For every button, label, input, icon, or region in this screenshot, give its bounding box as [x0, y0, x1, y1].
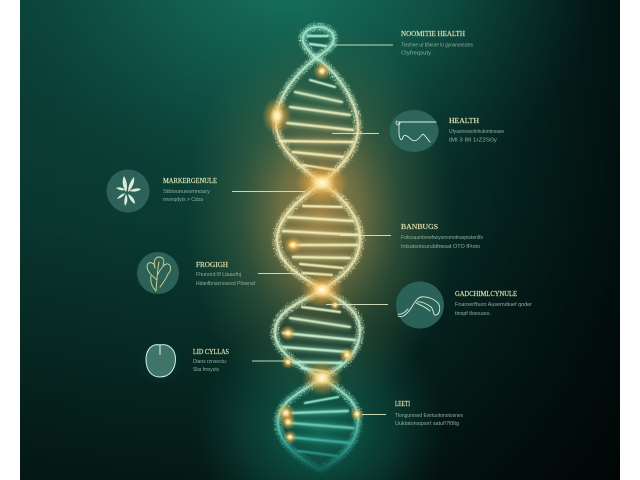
- callout: leeti: Tlongumsed Evirtuotonotosnes: [395, 413, 463, 419]
- callout: leeti: LEETI: [395, 399, 410, 408]
- leader lines: [232, 45, 393, 414]
- helix fuzzy particles: [275, 27, 360, 470]
- callout: frogigh: Fhunonl:0f Ltaaufnj: [196, 272, 241, 278]
- callout: lid cyllas: Sba fmsyuts: [193, 367, 219, 373]
- callout: top health: [401, 29, 473, 56]
- callout: frogigh: FROGIGH: [196, 260, 229, 269]
- callout: top health: NOOMITIE HEALTH: [401, 29, 466, 38]
- callout: markergenule: Stbiounuesmnoary: [163, 189, 210, 195]
- helix rungs: [280, 36, 358, 456]
- callout: markergenule: mwnqdyts > Cdza: [163, 197, 203, 203]
- callout: leeti: Uuktatonsqsort satuf!7l0ltg: [395, 421, 459, 427]
- callout: health: HEALTH: [449, 116, 480, 125]
- callout: bangugs: Intsatsoteurubthwsat OTO fFtsto: [401, 244, 480, 250]
- callout: health: tMl 3 8ll 1rZ2S0y: [449, 138, 497, 144]
- helix strand core: [275, 27, 360, 470]
- callout: gadchimlcynule: Fnaroerfburo Ausemdiuef qoder: [455, 302, 532, 308]
- DNA double helix: [262, 27, 364, 470]
- callout: lid cyllas: LID CYLLAS: [193, 347, 229, 356]
- callout: bangugs: [401, 222, 483, 250]
- icon: leaf in circle: [137, 252, 179, 294]
- callout: gadchimlcynule: tinspf tloesuoo.: [455, 311, 491, 317]
- callout: markergenule: MARKERGENULE: [163, 176, 217, 185]
- callout: bangugs: BANBUGS: [401, 222, 438, 231]
- icon: chart in circle: [390, 110, 438, 152]
- callout: frogigh: Hdanfbnacnoured Pfownaf: [196, 281, 256, 287]
- icon: organ in circle: [396, 282, 444, 328]
- callout: health: Ufyaoneondnhutontnoase: [449, 129, 504, 135]
- callout: lid cyllas: [193, 347, 229, 373]
- callout: health: [449, 116, 504, 144]
- callout: leeti: [395, 399, 463, 427]
- callout: gadchimlcynule: [455, 289, 532, 317]
- callout: lid cyllas: Dians rznsectu:: [193, 359, 227, 365]
- callout: bangugs: Fotosauntrewhwyunsmotnaqnstenlfs: [401, 235, 483, 241]
- callout: gadchimlcynule: GADCHIMLCYNULE: [455, 289, 517, 298]
- glowing nodes: [262, 62, 364, 444]
- callout: markergenule: [163, 176, 217, 203]
- callout: top health: Ctyfreqsuty: [401, 50, 431, 56]
- helix strand and rung glow: [275, 27, 360, 470]
- icon: leaf burst in circle: [106, 170, 150, 212]
- callout: frogigh: [196, 260, 256, 287]
- icon: apple outline: [139, 340, 181, 382]
- callout: top health: Treshne ur bfwure lo gyoanorezies: [401, 42, 473, 48]
